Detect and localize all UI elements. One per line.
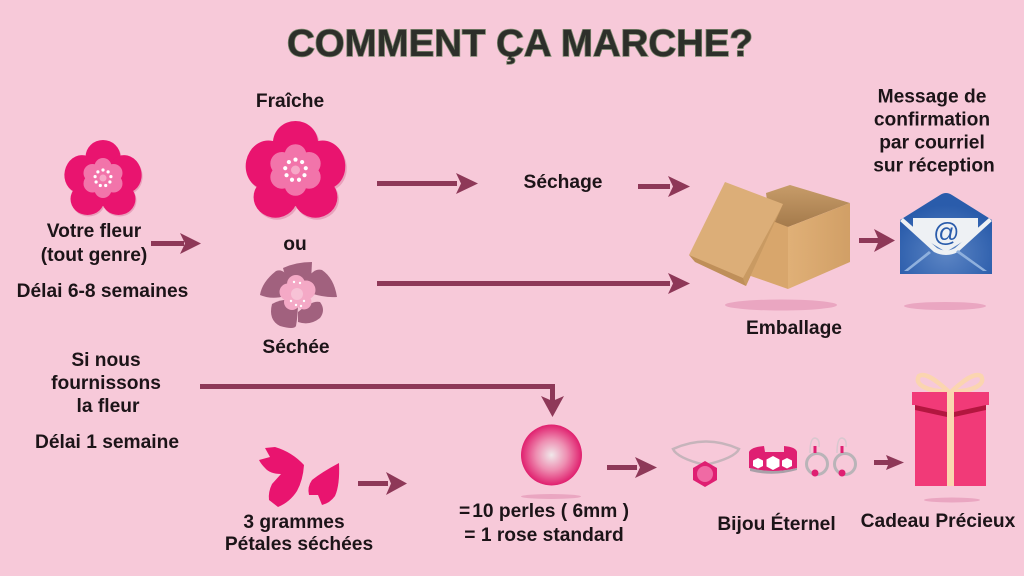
icon: dried flower [260,262,337,328]
text: cadeau précieux: Cadeau Précieux [861,511,1016,532]
icon: dried petals [259,447,339,507]
text: 10 perles = 1 rose: = 1 rose standard [464,525,624,546]
icon: small fresh flower [61,140,146,216]
text: délai 1 semaine: Délai 1 semaine [35,432,179,453]
text: séchage: Séchage [524,172,603,193]
arrow: fleur fournie to perle [200,384,564,417]
arrow: fleur to options [151,233,201,254]
arrow: séchage to emballage [638,176,690,197]
icon: earrings [806,438,856,476]
text: fraîche: Fraîche [256,91,324,112]
text: séchée: Séchée [262,337,330,358]
text: si nous fournissons la fleur: la fleur [77,396,140,417]
text: message de confirmation: sur réception [873,156,995,176]
text: votre fleur: Votre fleur [47,221,142,242]
text: message de confirmation: par courriel [879,132,985,154]
arrow: perle to bijou [607,457,657,478]
arrow: bijou to cadeau [874,455,904,470]
text: message de confirmation: confirmation [874,110,990,130]
text: bijou éternel: Bijou Éternel [717,513,836,535]
text: 3 grammes pétales séchées [225,512,373,555]
text: 10 perles = 1 rose [459,501,629,546]
icon: necklace [673,442,739,487]
text: emballage: Emballage [746,318,842,339]
text: 10 perles = 1 rose: =10 perles ( 6mm ) [459,501,629,522]
title: COMMENT ÇA MARCHE? [287,23,753,65]
text: délai 6-8 semaines: Délai 6-8 semaines [17,281,188,302]
shadow: box [725,300,837,310]
text: 3 grammes pétales séchées: Pétales séchées [225,534,373,555]
shadow: pearl [521,494,581,499]
text: si nous fournissons la fleur: Si nous [71,350,141,371]
arrow: emballage to message [859,229,895,252]
shadow: envelope [904,302,986,310]
text: ou: ou [283,234,307,255]
icon: open cardboard box [689,182,850,289]
arrow: pétales to perle [358,472,407,495]
arrow: fraîche to séchage [377,173,478,194]
icon: large fresh flower [241,121,351,220]
text: message de confirmation [873,86,995,176]
text: si nous fournissons la fleur [51,350,161,417]
shadow: gift [924,498,980,502]
icon: bracelet [749,446,797,474]
text: 3 grammes pétales séchées: 3 grammes [243,512,345,533]
arrow: séchée to emballage [377,273,690,294]
text: votre fleur: (tout genre) [41,245,147,266]
text: votre fleur [41,221,147,266]
text: si nous fournissons la fleur: fournissons [51,373,161,394]
icon: email envelope: @ [933,217,959,247]
icon: email envelope [900,193,992,274]
icon: pearl [521,424,582,486]
icon: gift box [912,375,989,486]
text: message de confirmation: Message de [878,86,987,108]
